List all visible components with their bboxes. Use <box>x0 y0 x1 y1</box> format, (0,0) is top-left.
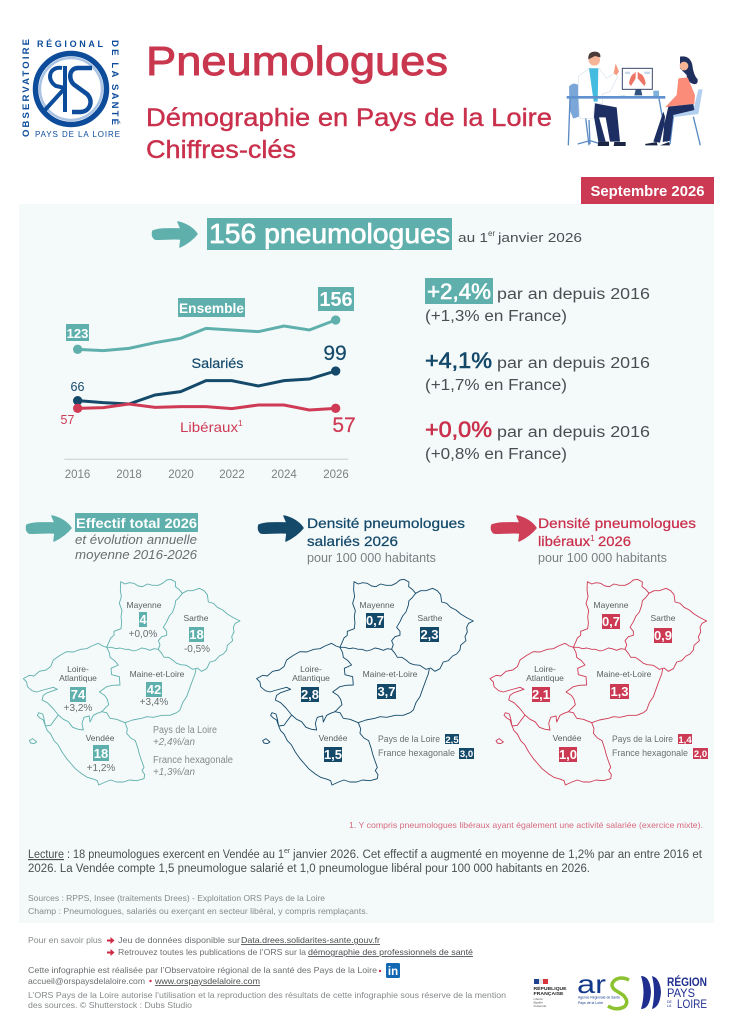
sources: Champ : Pneumologues, salariés ou exerçant en secteur libéral, y compris remplaçants. <box>28 906 368 916</box>
stat: libéraux +0,0%: par an depuis 2016 <box>497 424 650 441</box>
map: densité salariés: Atlantique <box>292 673 330 683</box>
map: densité libéraux: Maine-et-Loire <box>597 669 652 679</box>
logo: Région Pays de la Loire: PAYS <box>667 988 695 1000</box>
icon: LinkedIn <box>386 963 400 978</box>
headline: 156 pneumologues: 156 pneumologues <box>209 218 450 249</box>
map: effectif total: -0,5% <box>184 644 210 655</box>
reading note <box>28 848 703 875</box>
main panel background <box>19 204 714 923</box>
legal note <box>28 990 506 1010</box>
x axis labels: 2016 <box>65 469 90 481</box>
heading: densité libéraux: Densité pneumologues <box>538 515 696 531</box>
headline: 156 pneumologues: janvier 2026 <box>497 230 582 245</box>
subtitle <box>146 104 552 164</box>
map: densité salariés: 0,7 <box>366 613 384 628</box>
logo: ARS: Agence Régionale de Santé <box>578 996 620 1000</box>
map: densité libéraux: Loire- <box>534 664 556 674</box>
map: densité salariés: Maine-et-Loire <box>363 669 418 679</box>
icon: LinkedIn: in <box>388 966 398 978</box>
map: effectif total: Vendée <box>86 733 115 743</box>
heading: densité salariés <box>258 515 465 565</box>
stat: salariés +4,1%: (+1,7% en France) <box>425 377 567 394</box>
map: densité libéraux: 0,7 <box>602 614 620 629</box>
label: Salariés: Salariés <box>192 355 244 371</box>
logo: ORS Pays de la Loire: RÉGIONAL <box>37 39 104 49</box>
map: densité libéraux <box>490 579 708 785</box>
stat: salariés +4,1% <box>425 348 650 394</box>
footer links: Data.drees.solidarites-sante.gouv.fr <box>241 935 380 945</box>
illustration: doctor and patient with lungs on screen <box>567 52 703 146</box>
footer credits: Cette infographie est réalisée par l’Observatoire régional de la santé des Pays de la Loire <box>28 965 377 975</box>
stat: salariés +4,1%: par an depuis 2016 <box>497 355 650 372</box>
heading: densité salariés: Densité pneumologues <box>307 515 465 531</box>
stat: ensemble +2,4%: par an depuis 2016 <box>497 286 650 303</box>
heading: effectif total: Effectif total 2026 <box>76 515 197 531</box>
map: densité libéraux: 1,0 <box>559 747 577 762</box>
map: effectif total: 18 <box>189 627 204 642</box>
headline: 156 pneumologues: er <box>488 229 495 238</box>
x axis labels: 2026 <box>323 469 349 481</box>
map: densité libéraux: 0,9 <box>654 628 672 643</box>
date badge <box>581 177 714 204</box>
map: densité salariés: 3,0 <box>460 749 473 760</box>
label: 66: 66 <box>71 380 84 394</box>
map: densité salariés: 1,5 <box>324 747 342 762</box>
reading note: Lecture <box>28 849 64 861</box>
icon: navy arrow <box>258 516 303 541</box>
map: densité libéraux: Sarthe <box>650 613 676 623</box>
map: densité salariés: Sarthe <box>417 613 443 623</box>
map: effectif total: Loire- <box>67 664 89 674</box>
icon: red arrow bullet <box>107 949 114 956</box>
label: 123: 123 <box>67 326 88 341</box>
logo: ARS: Pays de la Loire <box>578 1001 603 1005</box>
label: Libéraux: 1 <box>238 418 243 428</box>
map: effectif total: +2,4%/an <box>153 737 195 748</box>
x axis labels <box>65 469 349 481</box>
map: densité libéraux: Vendée <box>553 733 582 743</box>
logo: République française: FRANÇAISE <box>534 991 564 996</box>
stat: ensemble +2,4% <box>425 278 650 325</box>
stat: ensemble +2,4%: +2,4% <box>427 279 491 304</box>
map: densité salariés: 2,5 <box>445 735 459 746</box>
stat: libéraux +0,0%: (+0,8% en France) <box>425 446 567 463</box>
logo: ARS: ar <box>577 969 606 999</box>
stat: salariés +4,1%: +4,1% <box>425 348 492 373</box>
reading note: 2026. La Vendée compte 1,5 pneumologue salarié et 1,0 pneumologue libéral pour 100 000 habitants en 2026. <box>28 863 590 875</box>
x axis labels: 2020 <box>168 469 194 481</box>
label: 57 left: 57 <box>61 413 74 427</box>
logo: ARS <box>577 969 629 1009</box>
map: effectif total: Atlantique <box>59 673 97 683</box>
logo: République française: Fraternité <box>534 1004 547 1008</box>
headline: 156 pneumologues <box>152 218 582 250</box>
map: effectif total: France hexagonale <box>153 755 233 766</box>
stat: libéraux +0,0%: +0,0% <box>425 417 492 442</box>
map: densité libéraux: France hexagonale <box>612 748 688 759</box>
heading: densité salariés: salariés 2026 <box>307 533 398 549</box>
label: 57 right: 57 <box>332 414 356 437</box>
map: densité libéraux: 1,4 <box>678 735 692 746</box>
logo: République française: RÉPUBLIQUE <box>534 984 566 991</box>
heading: densité salariés: pour 100 000 habitants <box>307 551 436 565</box>
heading: densité libéraux <box>491 515 696 565</box>
title: Pneumologues <box>146 38 448 84</box>
heading: densité libéraux: libéraux <box>538 533 590 549</box>
icon: red arrow bullet <box>107 937 114 944</box>
map: densité libéraux: 2,0 <box>694 749 707 760</box>
label: 156: 156 <box>319 289 353 311</box>
logo: Région Pays de la Loire <box>641 976 707 1011</box>
map: densité salariés: France hexagonale <box>378 748 455 759</box>
map: densité salariés: 3,7 <box>377 684 396 699</box>
map: effectif total: 42 <box>147 682 161 697</box>
stat: ensemble +2,4%: (+1,3% en France) <box>425 308 567 325</box>
footer credits: www.orspaysdelaloire.com <box>154 976 260 986</box>
map: effectif total <box>23 579 240 785</box>
map: densité libéraux: Atlantique <box>526 673 564 683</box>
reading note: : 18 pneumologues exercent en Vendée au 1 <box>67 849 284 861</box>
label: Ensemble: Ensemble <box>179 300 244 316</box>
icon: red arrow <box>491 516 536 541</box>
map: effectif total: Pays de la Loire <box>153 725 217 736</box>
line chart: effectifs 2016-2026 <box>61 287 356 481</box>
map: densité salariés: Mayenne <box>360 600 395 610</box>
logo: Région Pays de la Loire: LOIRE <box>677 999 707 1011</box>
map: effectif total: +1,2% <box>87 763 115 774</box>
map: densité salariés: Loire- <box>300 664 322 674</box>
map: effectif total: Sarthe <box>183 613 209 623</box>
map: densité salariés: Vendée <box>319 733 348 743</box>
map: densité salariés: Pays de la Loire <box>378 734 440 745</box>
map: effectif total: +3,4% <box>140 697 168 708</box>
logo: ORS Pays de la Loire: DE LA SANTÉ <box>109 40 120 125</box>
label: Libéraux: Libéraux <box>180 419 238 435</box>
map: effectif total: +1,3%/an <box>153 767 195 778</box>
heading: densité libéraux: pour 100 000 habitants <box>538 551 667 565</box>
map: densité salariés <box>257 579 474 785</box>
footer credits: accueil@orspaysdelaloire.com <box>28 976 145 986</box>
series: Ensemble <box>73 315 340 354</box>
reading note: janvier 2026. Cet effectif a augmenté en moyenne de 1,2% par an entre 2016 et <box>292 849 703 861</box>
logo: ORS Pays de la Loire: OBSERVATOIRE <box>21 39 32 137</box>
footer links: démographie des professionnels de santé <box>308 947 473 957</box>
series: Libéraux <box>73 404 340 413</box>
footer links <box>28 935 473 957</box>
heading: effectif total: moyenne 2016-2026 <box>75 548 197 562</box>
icon: teal arrow <box>26 516 71 541</box>
map: effectif total: 18 <box>94 746 108 761</box>
heading: effectif total <box>26 513 198 562</box>
logo: République française: Liberté <box>534 997 543 1001</box>
map: effectif total: Mayenne <box>127 600 162 610</box>
footer links: Pour en savoir plus <box>28 935 102 945</box>
label: 99: 99 <box>323 342 347 365</box>
map: effectif total: 4 <box>139 612 147 627</box>
heading: densité libéraux: 2026 <box>598 533 631 549</box>
x axis labels: 2018 <box>116 469 142 481</box>
logo: ORS Pays de la Loire <box>21 39 120 139</box>
map: effectif total: Maine-et-Loire <box>130 669 185 679</box>
footer links: Retrouvez toutes les publications de l’ORS sur la <box>118 947 306 957</box>
heading: densité libéraux: 1 <box>590 533 595 543</box>
subtitle: Chiffres-clés <box>146 136 296 164</box>
date badge: Septembre 2026 <box>590 184 704 200</box>
sources: Sources : RPPS, Insee (traitements Drees) - Exploitation ORS Pays de la Loire <box>28 893 325 903</box>
logo: ORS Pays de la Loire: PAYS DE LA LOIRE <box>35 130 120 139</box>
headline: 156 pneumologues: au 1 <box>458 230 488 245</box>
sources <box>28 893 368 916</box>
x axis labels: 2024 <box>271 469 297 481</box>
map: densité libéraux: 1,3 <box>610 684 629 699</box>
legal note: L’ORS Pays de la Loire autorise l’utilisation et la reproduction des résultats de cette infographie sous réserve de la mention <box>28 990 506 1000</box>
logo: Région Pays de la Loire: LA <box>667 1004 672 1008</box>
map: densité libéraux: 2,1 <box>532 687 550 702</box>
reading note: er <box>284 848 291 855</box>
map: densité salariés: 2,3 <box>420 627 439 642</box>
map: densité libéraux: Pays de la Loire <box>612 734 673 745</box>
map: effectif total: +3,2% <box>64 703 92 714</box>
subtitle: Démographie en Pays de la Loire <box>146 104 552 132</box>
map: densité salariés: 2,8 <box>301 687 319 702</box>
logo: République française: Égalité <box>534 1000 543 1004</box>
footer credits <box>28 965 381 986</box>
x axis labels: 2022 <box>219 469 245 481</box>
heading: effectif total: et évolution annuelle <box>75 533 197 547</box>
logo: République française <box>534 979 566 1008</box>
series: Salariés <box>73 366 340 405</box>
logo: Région Pays de la Loire: DE <box>667 1000 673 1004</box>
legal note: des sources. © Shutterstock : Dubs Studio <box>28 1000 192 1010</box>
footnote: 1. Y compris pneumologues libéraux ayant également une activité salariée (exercice mixte). <box>349 820 703 830</box>
logo: Région Pays de la Loire: RÉGION <box>667 976 707 989</box>
map: effectif total: +0,0% <box>129 629 157 640</box>
stat: libéraux +0,0% <box>425 417 650 463</box>
map: effectif total: 74 <box>71 687 86 702</box>
icon: teal arrow <box>152 222 197 247</box>
map: densité libéraux: Mayenne <box>594 600 629 610</box>
footer links: Jeu de données disponible sur <box>118 935 240 945</box>
